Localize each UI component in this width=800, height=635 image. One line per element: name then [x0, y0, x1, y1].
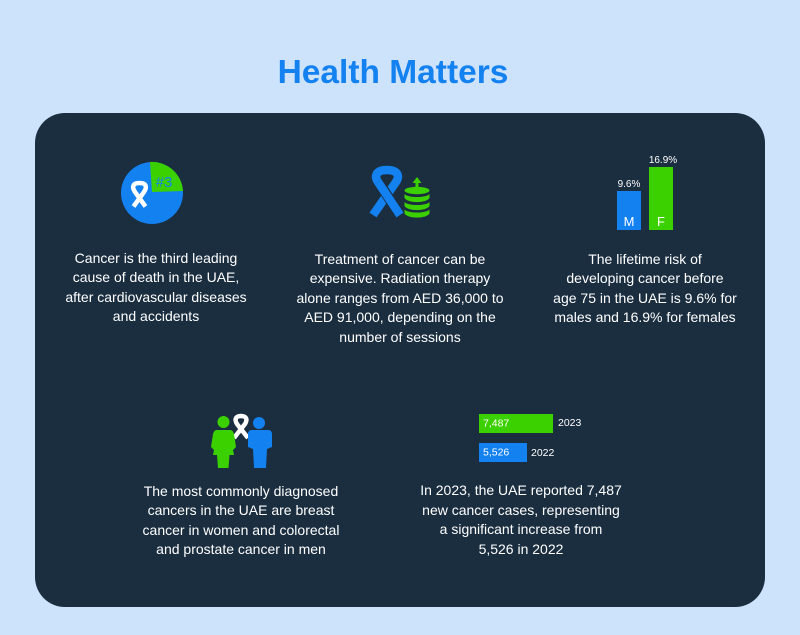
bar chart: new cases: 2022 [531, 447, 555, 459]
text: third leading cause [65, 250, 247, 324]
bar chart: new cases: 2023 [558, 417, 582, 429]
icon: woman, man and ribbon [211, 416, 272, 468]
bar chart: lifetime risk: F [657, 214, 665, 229]
text: treatment cost: AED 91,000, depending on the [304, 309, 496, 325]
text: commonly diagnosed: The most commonly diagnosed [144, 482, 338, 498]
text: treatment cost: Treatment of cancer can be [315, 250, 485, 266]
text: lifetime risk: males and 16.9% for females [554, 309, 736, 325]
text: treatment cost: expensive. Radiation therapy [310, 270, 490, 286]
text: treatment cost: number of sessions [339, 329, 461, 345]
title: Health Matters [278, 54, 508, 91]
text: commonly diagnosed: cancers in the UAE are breast [148, 502, 334, 518]
icon: pie chart with ribbon: #3 [156, 174, 172, 191]
text: commonly diagnosed: and prostate cancer in men [156, 541, 326, 557]
bar chart: new cases: 5,526 [483, 446, 509, 458]
text: third leading cause: after cardiovascular diseases [65, 289, 247, 305]
icon: pie chart with ribbon [121, 162, 183, 224]
bar chart: new cases: 7,487 [483, 418, 509, 430]
bar chart: new cases [479, 414, 582, 462]
icon: ribbon with coins [373, 170, 430, 218]
panel: dark background [35, 113, 765, 607]
text: new cases: new cancer cases, representing [422, 502, 620, 518]
text: lifetime risk: The lifetime risk of [588, 250, 702, 266]
text: commonly diagnosed: cancer in women and colorectal [143, 522, 339, 538]
text: treatment cost: alone ranges from AED 36,000 to [296, 290, 504, 306]
text: new cases: a significant increase from [440, 521, 602, 537]
text: new cases [420, 482, 622, 557]
text: third leading cause: and accidents [113, 308, 199, 324]
bar chart: lifetime risk: 16.9% [649, 155, 677, 166]
bar chart: lifetime risk: M [624, 214, 634, 229]
text: commonly diagnosed [143, 482, 339, 557]
text: new cases: In 2023, the UAE reported 7,487 [420, 482, 622, 498]
bar chart: lifetime risk: 9.6% [618, 179, 641, 190]
bar chart: lifetime risk [617, 155, 677, 230]
text: lifetime risk: developing cancer before [566, 270, 724, 286]
text: lifetime risk: age 75 in the UAE is 9.6% for [553, 290, 737, 306]
text: third leading cause: cause of death in the UAE, [73, 269, 239, 285]
text: new cases: 5,526 in 2022 [479, 541, 563, 557]
text: lifetime risk [553, 250, 737, 325]
text: third leading cause: Cancer is the third leading [75, 250, 237, 266]
text: treatment cost [296, 250, 504, 345]
